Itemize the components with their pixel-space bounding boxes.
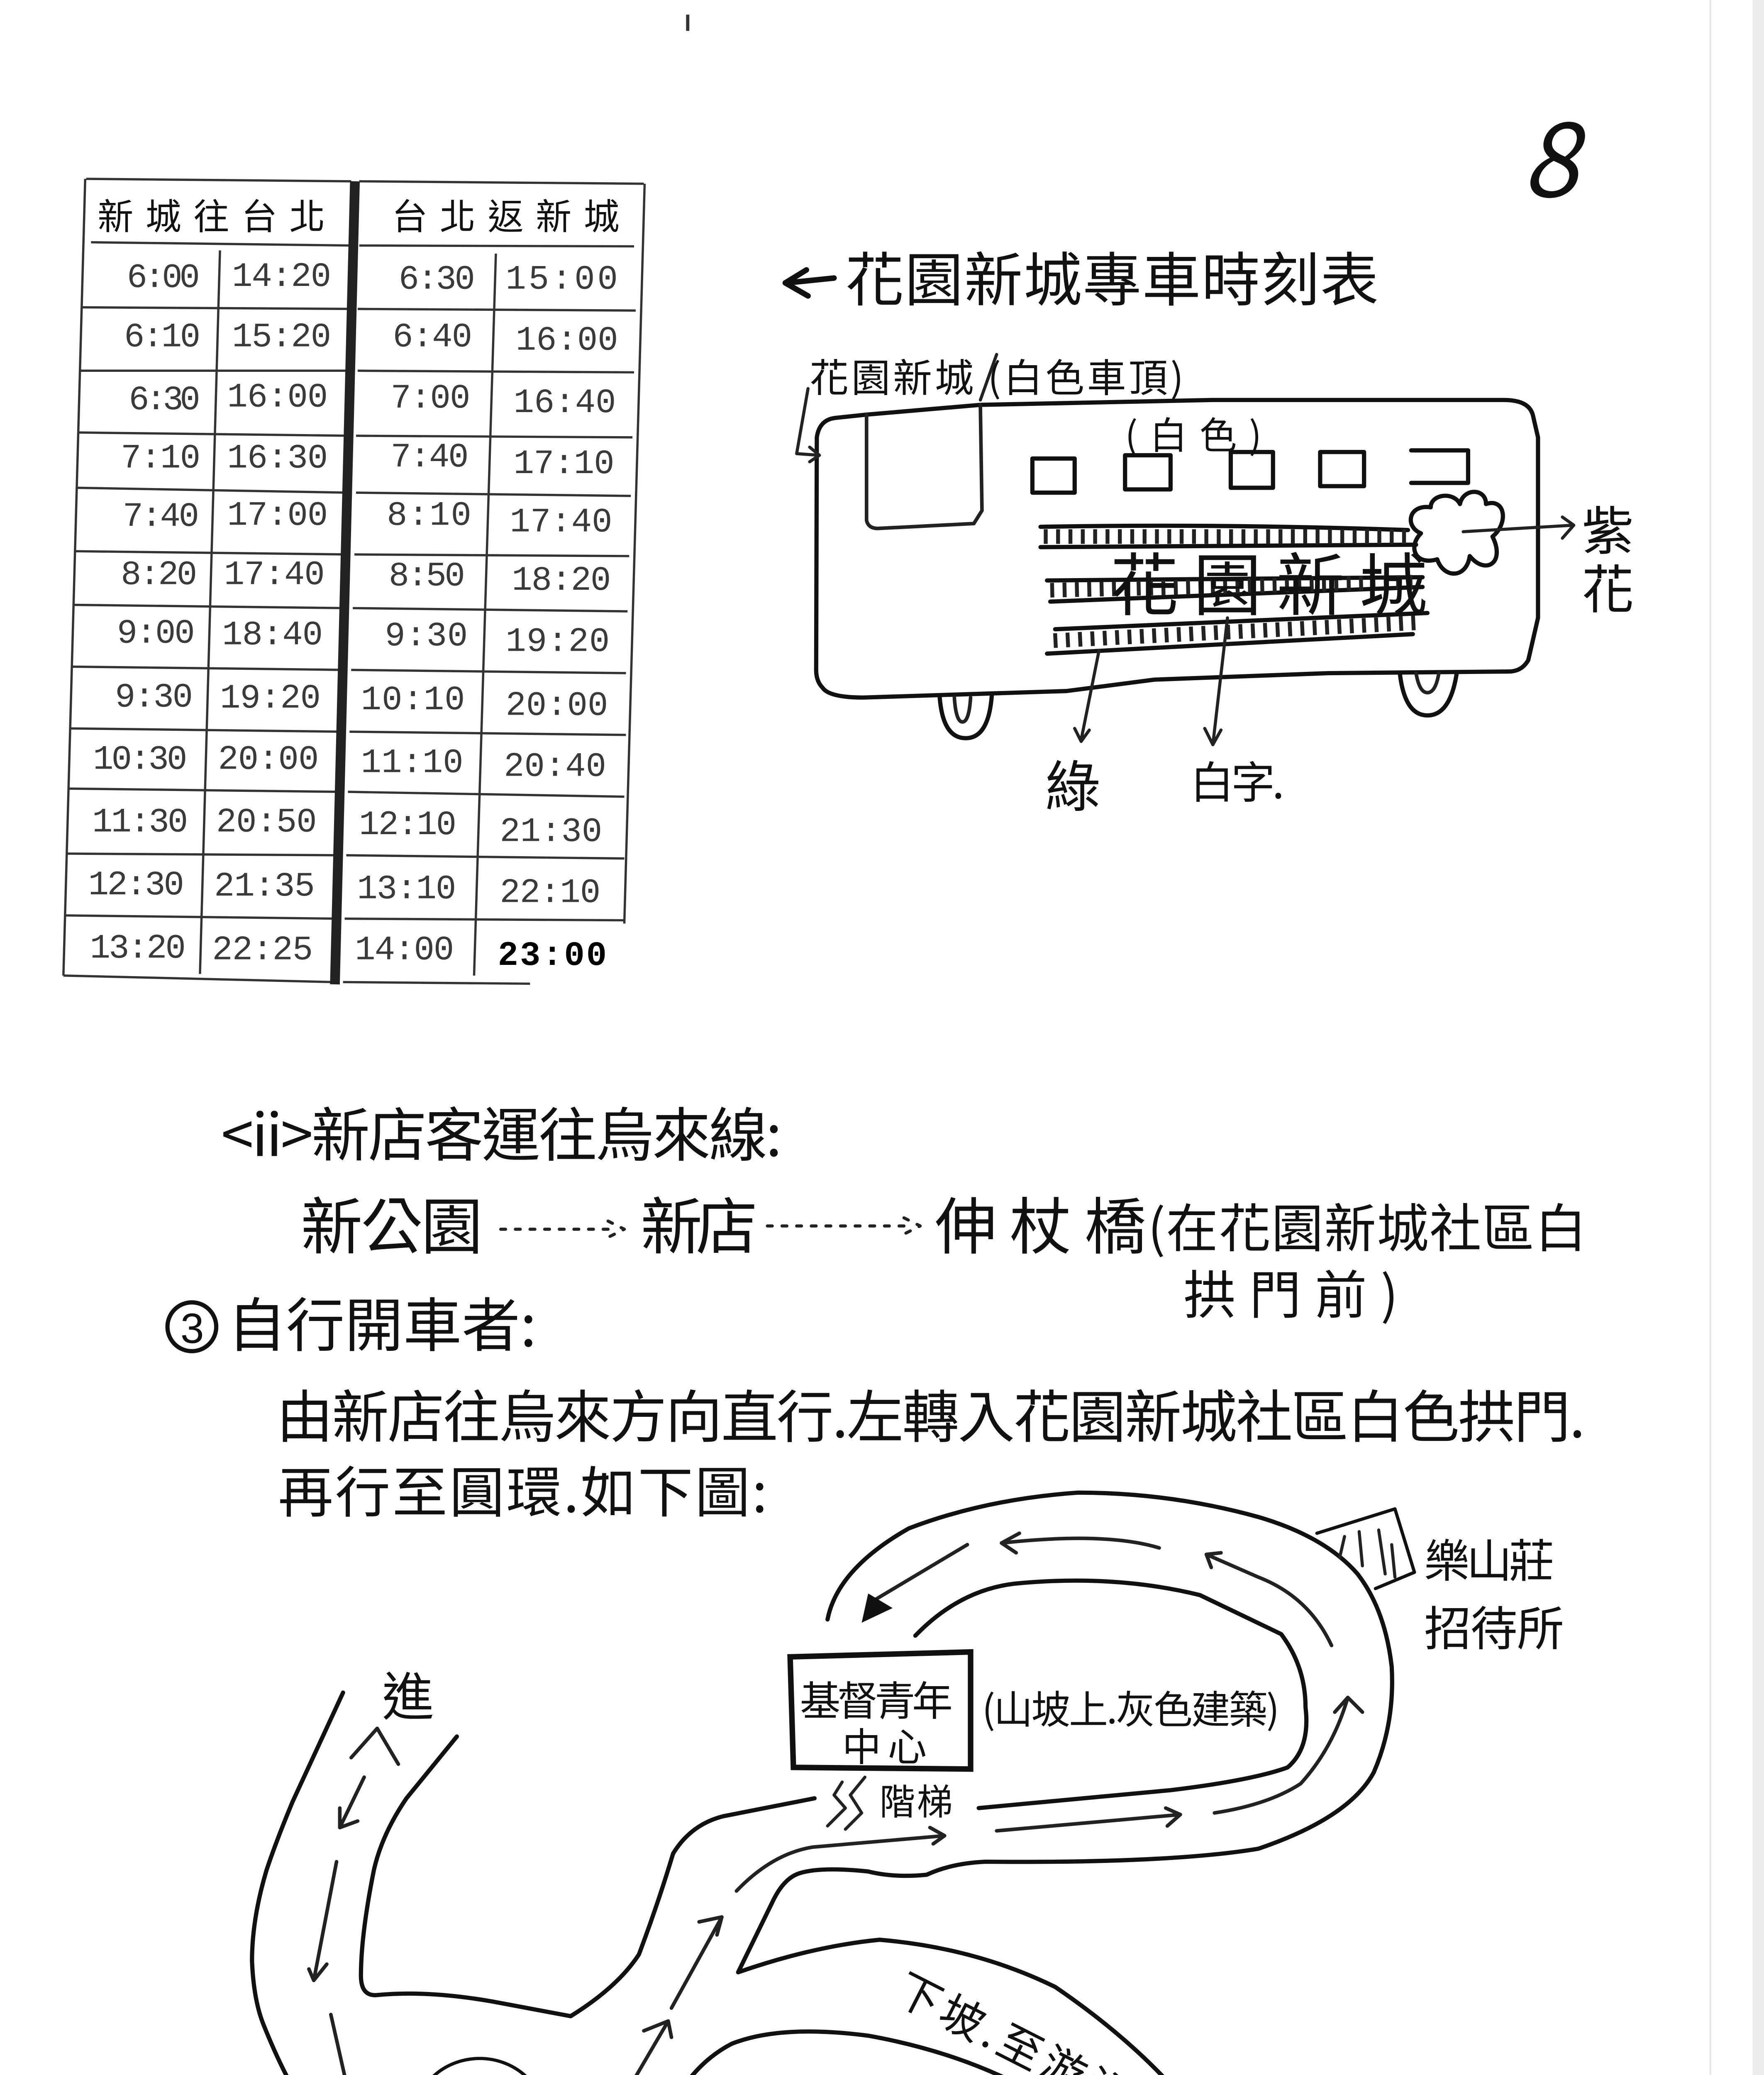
stairs and label: 階梯: 階梯 — [880, 1773, 953, 1825]
table times: 台北返新城: 6:40 — [393, 318, 472, 357]
arrow and label: 綠: 綠 — [1045, 742, 1100, 823]
table times: 新城往台北: 19:20 — [220, 679, 321, 718]
table times: 台北返新城: 19:20 — [505, 622, 610, 661]
label: 花園新城 白色車頂: 花園新城 (白色車頂) — [810, 347, 1183, 403]
table times: 新城往台北: 16:00 — [227, 378, 328, 417]
label: 白色: (白色) — [1125, 405, 1261, 459]
table times: 台北返新城: 22:10 — [500, 874, 600, 913]
table times: 新城往台北: 17:00 — [227, 496, 328, 535]
green stripes — [1041, 526, 1427, 654]
icon: purple flower — [1411, 492, 1503, 574]
table times: 新城往台北: 20:00 — [218, 740, 319, 779]
table header: 台北返新城 — [392, 188, 620, 239]
table times: 台北返新城: 12:10 — [359, 806, 456, 845]
table times: 新城往台北: 8:20 — [121, 556, 197, 595]
table times: 新城往台北: 11:30 — [92, 803, 188, 842]
route stops: (在花園新城社區白 — [1148, 1187, 1587, 1262]
table times: 新城往台北: 16:30 — [227, 439, 328, 478]
table times: 台北返新城: 13:10 — [357, 870, 456, 908]
table times: 台北返新城: 20:40 — [504, 748, 606, 786]
bus wheels — [940, 673, 1457, 738]
table times: 台北返新城: 20:00 — [505, 686, 608, 725]
arrow and label: 綠 — [1045, 650, 1100, 823]
building: 基督青年中心 — [790, 1652, 971, 1772]
route stops: 拱門前) — [1183, 1254, 1398, 1329]
timetable — [63, 179, 644, 984]
table times: 新城往台北: 7:10 — [121, 439, 200, 478]
arrow and label: 紫花 — [1463, 490, 1634, 623]
table header: 新城往台北 — [98, 188, 325, 239]
building: 基督青年中心: 中心 — [842, 1716, 927, 1772]
driving heading: 3 — [181, 1305, 204, 1352]
arrow and label: 紫花: 花 — [1582, 548, 1634, 623]
bus lettering: 花園新城 — [1110, 531, 1427, 630]
table times: 台北返新城: 16:00 — [516, 321, 618, 360]
table times: 新城往台北: 17:40 — [224, 556, 325, 595]
table times: 台北返新城: 14:00 — [355, 931, 454, 970]
building: 基督青年中心: 基督青年 — [800, 1668, 953, 1727]
table times: 新城往台北: 9:30 — [115, 678, 193, 717]
table times: 新城往台北: 13:20 — [90, 930, 186, 968]
arrow and label: 紫花: 紫 — [1582, 490, 1634, 565]
bus diagram — [797, 347, 1634, 823]
stairs and label: 階梯 — [827, 1773, 953, 1829]
driving directions: 由新店往烏來方向直行.左轉入花園新城社區白色拱門. — [276, 1372, 1585, 1454]
driving heading: 自行開車者: — [228, 1278, 537, 1363]
route stops — [301, 1177, 1587, 1329]
table times: 新城往台北 — [88, 258, 331, 970]
table times: 台北返新城: 18:20 — [512, 561, 611, 600]
table times: 台北返新城: 11:10 — [361, 744, 464, 783]
bus door — [866, 405, 982, 528]
table header — [98, 188, 620, 239]
table times: 台北返新城: 17:10 — [514, 445, 615, 483]
roads — [197, 1493, 1392, 2075]
table times: 台北返新城: 8:50 — [389, 557, 465, 596]
table times: 新城往台北: 21:35 — [214, 867, 315, 906]
bus body — [816, 400, 1538, 698]
table times: 新城往台北: 7:40 — [123, 498, 199, 536]
building: 樂山莊招待所: 樂山莊 — [1424, 1524, 1554, 1590]
building: 樂山莊招待所: 招待所 — [1424, 1591, 1564, 1659]
table times: 台北返新城: 21:30 — [500, 813, 602, 851]
scanned page right edge — [1710, 0, 1764, 2075]
page number: 8 — [1522, 80, 1587, 226]
table times: 台北返新城: 6:30 — [399, 260, 475, 299]
table times: 台北返新城: 9:30 — [385, 617, 468, 656]
arrow: points to timetable — [785, 270, 834, 296]
route stops: 新公園 — [301, 1177, 483, 1267]
arrow and label: 白字 — [1190, 618, 1284, 811]
table times: 新城往台北: 10:30 — [93, 740, 187, 779]
directions text — [168, 1088, 1587, 1528]
table times: 台北返新城: 8:10 — [387, 496, 471, 535]
table times: 新城往台北: 18:40 — [222, 616, 323, 654]
route arrows — [309, 1533, 1362, 2075]
roundabout pond — [415, 2058, 545, 2075]
table times: 台北返新城 — [355, 260, 618, 975]
table times: 新城往台北: 6:30 — [129, 381, 200, 420]
label: 進: 進 — [382, 1655, 434, 1731]
table times: 台北返新城: 16:40 — [514, 384, 616, 422]
label arrow: roof — [797, 354, 997, 462]
table times: 新城往台北: 22:25 — [212, 931, 313, 970]
label: 山坡上 灰色建築: (山坡上.灰色建築) — [982, 1679, 1279, 1735]
table times: 新城往台北: 14:20 — [232, 258, 331, 296]
arrow and label: 白字: 白字. — [1190, 748, 1284, 811]
table times: 新城往台北: 6:10 — [124, 318, 200, 357]
table times: 台北返新城: 7:00 — [390, 379, 470, 418]
table times: 台北返新城: 17:40 — [510, 503, 612, 542]
table times: 台北返新城: 7:40 — [390, 438, 469, 477]
route stops: 伸杖橋 — [935, 1177, 1146, 1267]
table times: 台北返新城: 23:00 — [498, 937, 607, 975]
bus windows — [1032, 450, 1468, 493]
building: 樂山莊招待所 — [1317, 1509, 1564, 1659]
table times: 台北返新城: 10:10 — [361, 681, 465, 720]
heading: 花園新城專車時刻表: 花園新城專車時刻表 — [845, 233, 1379, 318]
table times: 新城往台北: 12:30 — [88, 866, 184, 905]
table times: 台北返新城: 15:00 — [505, 260, 618, 299]
table times: 新城往台北: 15:20 — [232, 318, 331, 357]
directions text: 再行至圓環.如下圖: — [278, 1448, 767, 1528]
icon: destination arrowhead — [862, 1594, 893, 1623]
table times: 新城往台北: 9:00 — [117, 614, 195, 653]
route stops: 新店 — [641, 1177, 758, 1267]
table times: 新城往台北: 20:50 — [216, 803, 317, 842]
table times: 新城往台北: 6:00 — [127, 259, 200, 298]
scan mark at top — [686, 15, 689, 31]
table grid — [63, 179, 644, 984]
route heading: <ii>新店客運往烏來線: — [221, 1088, 782, 1173]
map — [197, 1493, 1564, 2075]
